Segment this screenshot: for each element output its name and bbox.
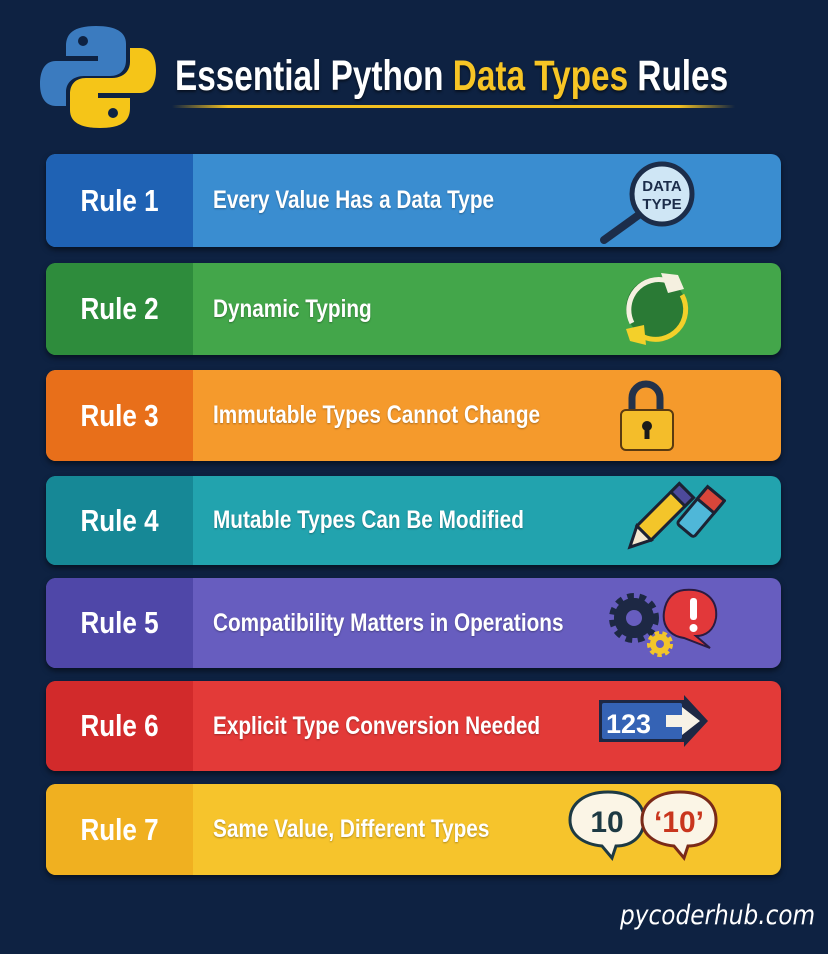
panel: rule 3: Immutable Types Cannot Change — [213, 401, 540, 429]
panel: rule 2 — [46, 263, 781, 355]
panel: rule 4 — [46, 476, 781, 565]
panel: rule 2: Rule 2 — [80, 291, 159, 326]
title: Essential Python Data Types Rules — [175, 52, 728, 100]
icon: padlock — [620, 380, 674, 451]
icon: 123 arrow: 123 — [606, 709, 651, 739]
icon: gears and alert — [609, 588, 718, 657]
panel: rule 1: Every Value Has a Data Type — [213, 186, 494, 214]
icon: pencil and eraser — [628, 481, 726, 550]
panel: rule 7: Rule 7 — [80, 812, 159, 846]
panel: rule 5: Rule 5 — [80, 605, 159, 640]
panel: rule 3 — [46, 370, 781, 461]
footer: website: pycoderhub.com — [620, 900, 815, 931]
panel: rule 1: Rule 1 — [80, 182, 159, 218]
icon: speech bubbles 10 — [568, 790, 718, 861]
panel: rule 6: Rule 6 — [80, 708, 159, 743]
icon: python logo — [40, 26, 156, 128]
panel: rule 5 — [46, 578, 781, 668]
icon: magnifier data type — [600, 162, 694, 244]
panel: rule 6 — [46, 681, 781, 771]
panel: rule 7: Same Value, Different Types — [213, 815, 489, 843]
panel: rule 3: Rule 3 — [80, 398, 159, 432]
icon: magnifier data type: TYPE — [642, 196, 682, 213]
panel: rule 4: Rule 4 — [80, 502, 159, 538]
icon: speech bubbles 10: 10 — [590, 806, 624, 839]
panel: rule 5: Compatibility Matters in Operations — [213, 608, 563, 636]
panel: rule 2: Dynamic Typing — [213, 294, 372, 322]
icon: 123 arrow — [599, 695, 708, 747]
panel: rule 1 — [46, 154, 781, 247]
icon: magnifier data type: DATA — [642, 178, 682, 195]
panel: rule 6: Explicit Type Conversion Needed — [213, 712, 540, 740]
panel: rule 7 — [46, 784, 781, 875]
icon: speech bubbles 10: ‘10’ — [654, 806, 704, 839]
panel: rule 4: Mutable Types Can Be Modified — [213, 506, 524, 534]
icon: cycle arrows — [626, 273, 688, 345]
